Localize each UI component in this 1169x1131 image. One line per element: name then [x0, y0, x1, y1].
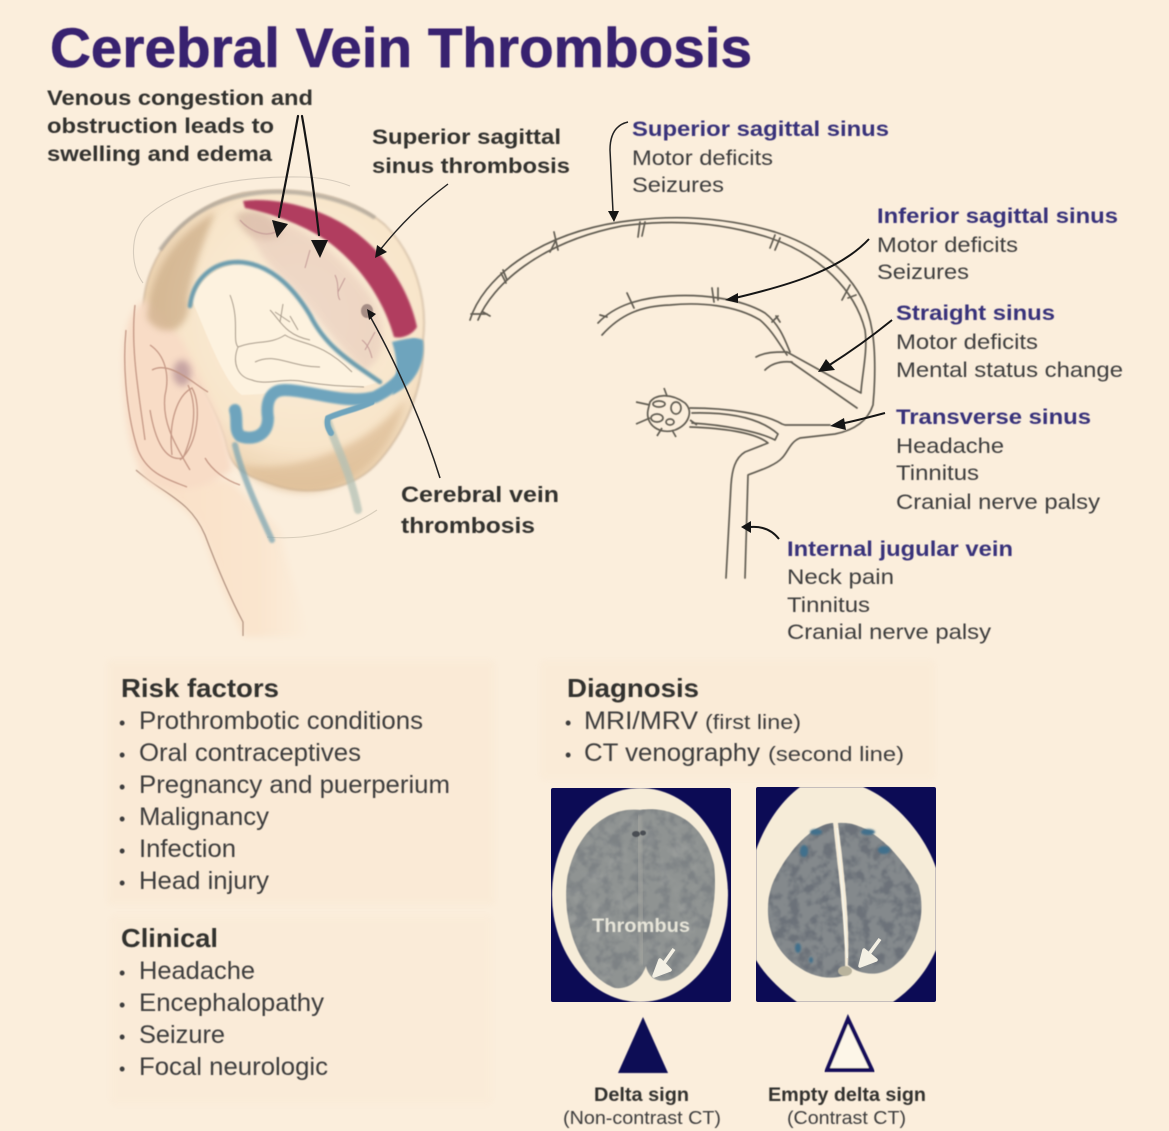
icon: filled delta triangle — [618, 1017, 668, 1073]
list: risk factors: • — [119, 745, 125, 765]
caption: delta sign: (Non-contrast CT) — [563, 1107, 721, 1128]
callout: venous congestion: obstruction leads to — [47, 115, 274, 138]
list: clinical: Seizure — [139, 1021, 225, 1049]
arrow: straight sinus — [818, 320, 892, 372]
label: superior sagittal sinus: Motor deficits — [632, 146, 773, 170]
callout: cerebral vein thrombosis: Cerebral vein — [401, 482, 559, 507]
dark sulci — [795, 829, 890, 963]
arrow: cerebral vein thrombosis — [367, 309, 440, 478]
list: clinical: • — [119, 1059, 125, 1079]
label: superior sagittal sinus: Superior sagittal sinus — [632, 118, 889, 141]
CT scan: delta sign — [551, 788, 731, 1002]
list: clinical: • — [119, 963, 125, 983]
list: risk factors: • — [119, 777, 125, 797]
label: superior sagittal sinus: Seizures — [632, 173, 724, 197]
skull — [143, 190, 424, 491]
label: transverse sinus: Cranial nerve palsy — [896, 490, 1100, 514]
list: diagnosis: • — [565, 713, 571, 733]
label: internal jugular vein: Internal jugular vein — [787, 538, 1013, 561]
list: clinical: • — [119, 995, 125, 1015]
straight sinus — [787, 352, 861, 408]
list: risk factors: Malignancy — [139, 803, 270, 831]
arrow: superior sagittal sinus thrombosis — [375, 184, 448, 258]
caption: empty delta sign: Empty delta sign — [768, 1085, 926, 1106]
list: risk factors: Prothrombotic conditions — [139, 707, 423, 735]
face — [124, 300, 232, 489]
callout: superior sagittal sinus thrombosis: sinus thrombosis — [372, 155, 570, 178]
label: transverse sinus — [896, 406, 1100, 514]
list: clinical: Encephalopathy — [139, 989, 325, 1017]
transverse sinus in blue — [235, 345, 414, 438]
label: straight sinus — [896, 302, 1123, 382]
transverse and jugular vein — [690, 408, 830, 578]
callout: venous congestion: Venous congestion and — [47, 87, 313, 110]
cortex background — [192, 264, 378, 395]
inferior sagittal sinus — [598, 296, 790, 352]
callout: superior sagittal sinus thrombosis: Superior sagittal — [372, 126, 561, 149]
list: diagnosis: CT venography — [584, 739, 761, 767]
frontal bone texture — [147, 212, 215, 330]
cortical pink veins — [240, 220, 375, 358]
label: internal jugular vein: Tinnitus — [787, 593, 870, 617]
label: inferior sagittal sinus: Seizures — [877, 260, 969, 284]
label: internal jugular vein — [787, 538, 1013, 644]
callout: venous congestion: swelling and edema — [47, 143, 272, 166]
inferior sagittal branch — [756, 352, 792, 370]
label: straight sinus: Motor deficits — [896, 330, 1038, 354]
brain folds — [230, 295, 364, 387]
caption: delta sign: Delta sign — [594, 1085, 689, 1106]
arrow: empty delta — [860, 939, 880, 966]
list: diagnosis: (second line) — [768, 744, 904, 766]
caption: empty delta sign: (Contrast CT) — [787, 1107, 906, 1128]
label: inferior sagittal sinus: Inferior sagittal sinus — [877, 205, 1118, 228]
purple bruise at temple — [173, 360, 191, 386]
inferior sinus tributaries — [600, 288, 780, 322]
label: transverse sinus: Transverse sinus — [896, 406, 1091, 429]
list: risk factors: Infection — [139, 835, 236, 863]
facial contour lines — [125, 305, 240, 487]
label: thrombus: Thrombus — [592, 916, 690, 937]
thin cerebral vein in blue — [190, 262, 380, 382]
list: risk factors: Head injury — [139, 867, 270, 895]
superior sagittal sinus in red — [243, 200, 417, 338]
scalp outline — [133, 177, 350, 283]
arrow: inferior sagittal sinus — [725, 239, 869, 303]
sigmoid cap in blue — [392, 338, 423, 395]
list: risk factors: Oral contraceptives — [139, 739, 361, 767]
panel: clinical — [110, 915, 492, 1105]
jaw outline — [267, 510, 377, 538]
list: diagnosis: MRI/MRV — [584, 707, 698, 735]
list: diagnosis: • — [565, 745, 571, 765]
list: risk factors: Pregnancy and puerperium — [139, 771, 450, 799]
confluence torcula — [636, 388, 697, 437]
icon: empty delta triangle — [827, 1019, 872, 1070]
sinus with empty delta — [838, 966, 852, 976]
title: Cerebral Vein Thrombosis — [50, 16, 752, 79]
heading: risk factors: Risk factors — [121, 673, 279, 703]
neck — [137, 468, 310, 637]
CT scan: empty delta sign — [756, 787, 936, 1002]
diagram: venous sinus anatomy — [470, 218, 875, 578]
parietal bone texture — [235, 211, 282, 240]
left jugular branch — [235, 445, 272, 540]
list: risk factors: • — [119, 873, 125, 893]
callout: cerebral vein thrombosis: thrombosis — [401, 513, 535, 538]
label: straight sinus: Mental status change — [896, 358, 1123, 382]
panel: diagnosis — [540, 660, 935, 780]
list: clinical: • — [119, 1027, 125, 1047]
heading: clinical: Clinical — [121, 923, 218, 953]
label: internal jugular vein: Cranial nerve palsy — [787, 620, 991, 644]
label: inferior sagittal sinus — [877, 205, 1118, 284]
illustration: head with cerebral veins — [124, 177, 424, 637]
right jugular branch — [328, 422, 358, 510]
list: clinical: Focal neurologic — [139, 1053, 328, 1081]
superior sagittal sinus — [470, 218, 875, 578]
superior sinus tributaries — [471, 222, 856, 316]
panel: risk factors — [107, 660, 495, 905]
base of skull shading — [238, 400, 405, 493]
congestion blush — [245, 215, 383, 370]
label: superior sagittal sinus — [632, 118, 889, 197]
label: transverse sinus: Tinnitus — [896, 461, 979, 485]
caption: empty delta sign — [768, 1085, 926, 1128]
label: straight sinus: Straight sinus — [896, 302, 1055, 325]
label: inferior sagittal sinus: Motor deficits — [877, 233, 1018, 257]
arrow: internal jugular vein — [741, 521, 779, 539]
list: risk factors: • — [119, 713, 125, 733]
heading: diagnosis: Diagnosis — [567, 673, 699, 703]
arrow: superior sagittal sinus — [608, 122, 628, 222]
arrow: transverse sinus — [830, 413, 885, 430]
arrow: thrombus — [654, 949, 674, 976]
label: transverse sinus: Headache — [896, 434, 1004, 458]
arrows: congestion — [272, 116, 328, 258]
cortical vein thrombus spot — [361, 304, 373, 318]
skull rim — [160, 192, 375, 250]
list: diagnosis: (first line) — [705, 712, 801, 734]
bright falx — [837, 828, 847, 958]
list: risk factors: • — [119, 809, 125, 829]
caption: delta sign — [563, 1085, 721, 1128]
list: risk factors: • — [119, 841, 125, 861]
list: clinical: Headache — [139, 957, 255, 985]
label: internal jugular vein: Neck pain — [787, 565, 894, 589]
neck outline — [136, 470, 243, 636]
